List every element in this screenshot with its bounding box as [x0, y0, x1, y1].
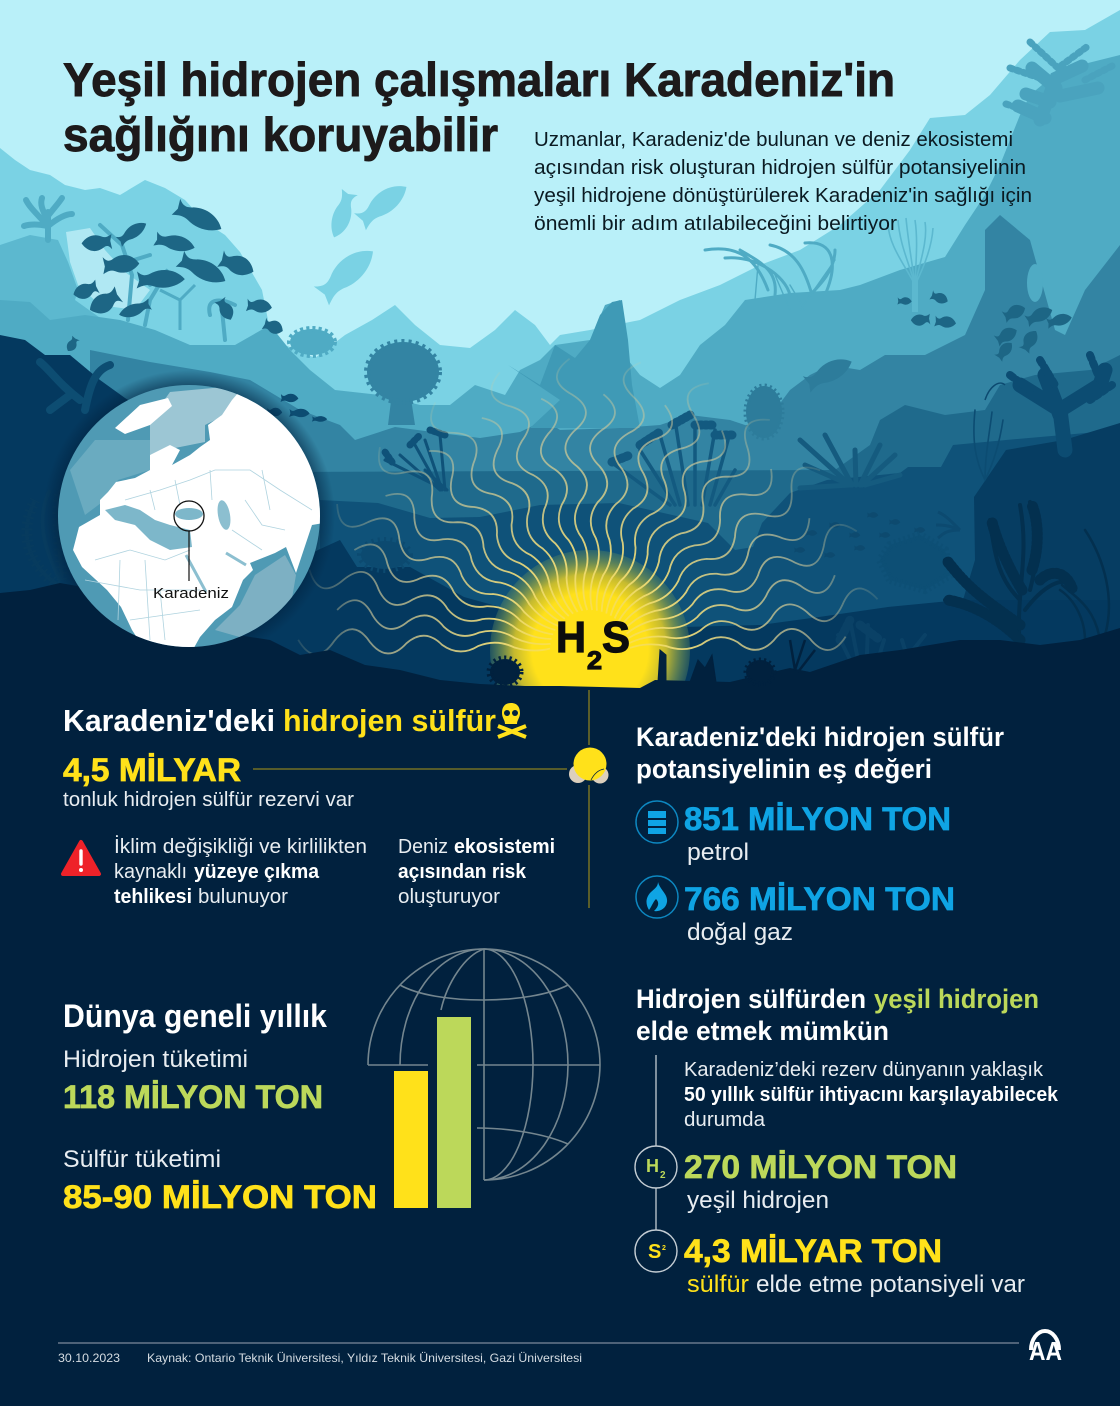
left palm coral — [24, 198, 72, 240]
stat: hydrogen consumption: Hidrojen tüketimi — [63, 1046, 248, 1073]
intro paragraph: açısından risk oluşturan hidrojen sülfür potansiyelinin — [534, 157, 1026, 179]
cave in right tower — [1027, 264, 1043, 302]
arctic shelf — [150, 388, 238, 455]
title: Yeşil hidrojen çalışmaları Karadeniz'in — [63, 53, 895, 106]
icon: oil barrel — [636, 801, 678, 843]
branching coral center — [612, 415, 735, 505]
intro paragraph: yeşil hidrojene dönüştürülerek Karadeniz'in sağlığı için — [534, 185, 1032, 207]
text: climate risk: kaynaklı — [114, 861, 187, 883]
H2S label: 2 — [587, 647, 602, 675]
small left coral — [160, 285, 334, 355]
far reef layer — [0, 10, 1120, 700]
text: reserve duration: durumda — [684, 1109, 766, 1131]
greenland — [115, 398, 172, 434]
title — [63, 53, 895, 161]
text: reserve duration: Karadeniz’deki rezerv dünyanın yaklaşık — [684, 1059, 1044, 1081]
stat: natural gas — [684, 881, 955, 946]
text: ecosystem risk — [398, 836, 555, 908]
fan plant right — [800, 435, 900, 488]
seabed silhouette — [0, 583, 1120, 1406]
hydrogen sulfide glow — [490, 550, 690, 750]
globe ocean — [58, 385, 320, 647]
icon: gas flame — [636, 876, 678, 918]
vertical connector line — [253, 690, 589, 908]
icon: sulfur nodule — [569, 748, 608, 784]
kelp upper right — [705, 243, 835, 310]
heading: green hydrogen: elde etmek mümkün — [636, 1016, 889, 1046]
marker line — [188, 531, 190, 581]
text: reserve duration — [684, 1059, 1059, 1131]
text: climate risk — [114, 835, 367, 908]
text: ecosystem risk: oluşturuyor — [398, 886, 500, 908]
H2S label: H — [556, 613, 586, 662]
left fish school — [64, 198, 285, 354]
marker label: Karadeniz — [153, 585, 229, 602]
mid reef layer — [320, 430, 1120, 700]
stat: reserve: 4,5 MİLYAR — [63, 752, 241, 788]
text: ecosystem risk: Deniz — [398, 836, 448, 858]
horizon band — [280, 355, 1120, 700]
icon: H2 circle — [635, 1146, 677, 1188]
wavy gas lines — [298, 358, 880, 663]
stat: petroleum — [684, 801, 951, 866]
round sponge coral — [880, 535, 950, 590]
intro paragraph: Uzmanlar, Karadeniz'de bulunan ve deniz ekosistemi — [534, 129, 1013, 151]
reef layer three — [0, 55, 1120, 700]
title: sağlığını koruyabilir — [63, 108, 498, 161]
intro paragraph — [534, 129, 1032, 235]
atlantic shelf — [70, 440, 150, 515]
icon: wireframe globe — [368, 949, 600, 1180]
icon: agency logo: AA — [1029, 1336, 1062, 1366]
sea fan upper right — [974, 355, 1112, 480]
branching coral center left — [385, 430, 447, 490]
H2S label — [556, 613, 630, 675]
text: climate risk: İklim değişikliği ve kirlilikten — [114, 835, 367, 858]
mediterranean sea — [105, 505, 192, 550]
lower coral right — [838, 620, 925, 680]
left dark plant — [27, 490, 62, 585]
stat: sulfur potential: elde etme potansiyeli var — [756, 1271, 1025, 1298]
footer: Kaynak: Ontario Teknik Üniversitesi, Yıldız Teknik Üniversitesi, Gazi Üniversitesi — [147, 1351, 582, 1365]
icon: warning triangle — [63, 842, 99, 874]
upright coral center right — [746, 386, 782, 438]
globe shadow — [43, 370, 335, 662]
stat: sulfur consumption — [63, 1146, 377, 1215]
bar chart — [394, 1017, 471, 1208]
intro paragraph: önemli bir adım atılabileceğini belirtiyor — [534, 213, 897, 235]
right mid fish — [897, 290, 1073, 362]
country borders — [85, 470, 312, 640]
stat: reserve: tonluk hidrojen sülfür rezervi var — [63, 789, 354, 811]
feather plant — [888, 218, 933, 312]
stat: sulfur potential: 4,3 MİLYAR TON — [684, 1233, 942, 1269]
heading: green hydrogen: Hidrojen sülfürden — [636, 984, 866, 1014]
top right coral — [1006, 42, 1112, 120]
stat: green hydrogen: 270 MİLYON TON — [684, 1149, 957, 1185]
heading: hydrogen sulfide: Karadeniz'deki — [63, 703, 275, 738]
land mass — [73, 385, 330, 655]
pale fish group — [312, 178, 412, 306]
heading: green hydrogen: yeşil hidrojen — [874, 984, 1039, 1014]
marker circle — [174, 501, 204, 531]
swimming fish — [802, 352, 856, 393]
text: climate risk: yüzeye çıkma — [194, 861, 320, 883]
right dark reef — [960, 423, 1120, 700]
icon: S2 circle: 2 — [662, 1245, 666, 1252]
stat: sulfur potential — [684, 1233, 1025, 1298]
text: reserve duration: 50 yıllık sülfür ihtiyacını karşılayabilecek — [684, 1084, 1059, 1106]
footer — [58, 1343, 1019, 1365]
heading: equivalent value: potansiyelinin eş değeri — [636, 754, 932, 784]
text: ecosystem risk: ekosistemi — [454, 836, 555, 858]
red sea and gulf — [186, 553, 246, 592]
stat: petroleum: petrol — [687, 839, 749, 866]
icon: H2 circle: H — [646, 1156, 659, 1176]
stat: hydrogen consumption — [63, 1046, 323, 1115]
large seaweed right — [945, 502, 1109, 650]
seabed corals — [490, 640, 815, 685]
text: climate risk: bulunuyor — [198, 886, 288, 908]
stat: green hydrogen — [684, 1149, 957, 1214]
heading: hydrogen sulfide: hidrojen sülfür — [283, 703, 496, 738]
left and lower dark reef — [0, 335, 1120, 700]
footer: 30.10.2023 — [58, 1351, 120, 1365]
dark fish near globe — [267, 394, 327, 422]
sea urchin left — [361, 541, 409, 569]
stat: natural gas: 766 MİLYON TON — [684, 881, 955, 917]
heading: equivalent value — [636, 722, 1004, 784]
left kelp — [100, 225, 235, 340]
stat: hydrogen consumption: 118 MİLYON TON — [63, 1079, 323, 1115]
heading: equivalent value: Karadeniz'deki hidrojen sülfür — [636, 722, 1004, 752]
reef layer four — [90, 215, 1120, 700]
H2S label: S — [602, 613, 630, 662]
stat: petroleum: 851 MİLYON TON — [684, 801, 951, 837]
text: ecosystem risk: açısından risk — [398, 861, 527, 883]
text: climate risk: tehlikesi — [114, 886, 192, 908]
icon: S2 circle — [635, 1230, 677, 1272]
icon: S2 circle: S — [648, 1241, 661, 1263]
heading: green hydrogen — [636, 984, 1039, 1046]
reef layer two — [0, 235, 200, 420]
stat: sulfur potential: sülfür — [687, 1271, 749, 1298]
light gap in left reef — [66, 228, 150, 310]
left top dark coral — [40, 362, 110, 410]
icon: H2 circle: 2 — [660, 1170, 666, 1181]
central coral tower — [508, 300, 640, 428]
icon: skull and crossbones — [498, 703, 526, 737]
heading: hydrogen sulfide — [63, 703, 496, 738]
stat: natural gas: doğal gaz — [687, 919, 793, 946]
stat: sulfur consumption: Sülfür tüketimi — [63, 1146, 221, 1173]
stat: reserve — [63, 752, 354, 811]
heading: world annual: Dünya geneli yıllık — [63, 998, 327, 1034]
indian ocean lighter — [215, 555, 296, 640]
fan right lower — [936, 383, 1005, 538]
caspian sea — [218, 500, 230, 530]
small fish school — [794, 512, 925, 558]
tree coral — [367, 342, 439, 425]
black sea — [175, 508, 203, 520]
stat: sulfur consumption: 85-90 MİLYON TON — [63, 1179, 377, 1215]
globe map with Karadeniz marker — [43, 370, 335, 662]
stat: green hydrogen: yeşil hidrojen — [687, 1187, 829, 1214]
